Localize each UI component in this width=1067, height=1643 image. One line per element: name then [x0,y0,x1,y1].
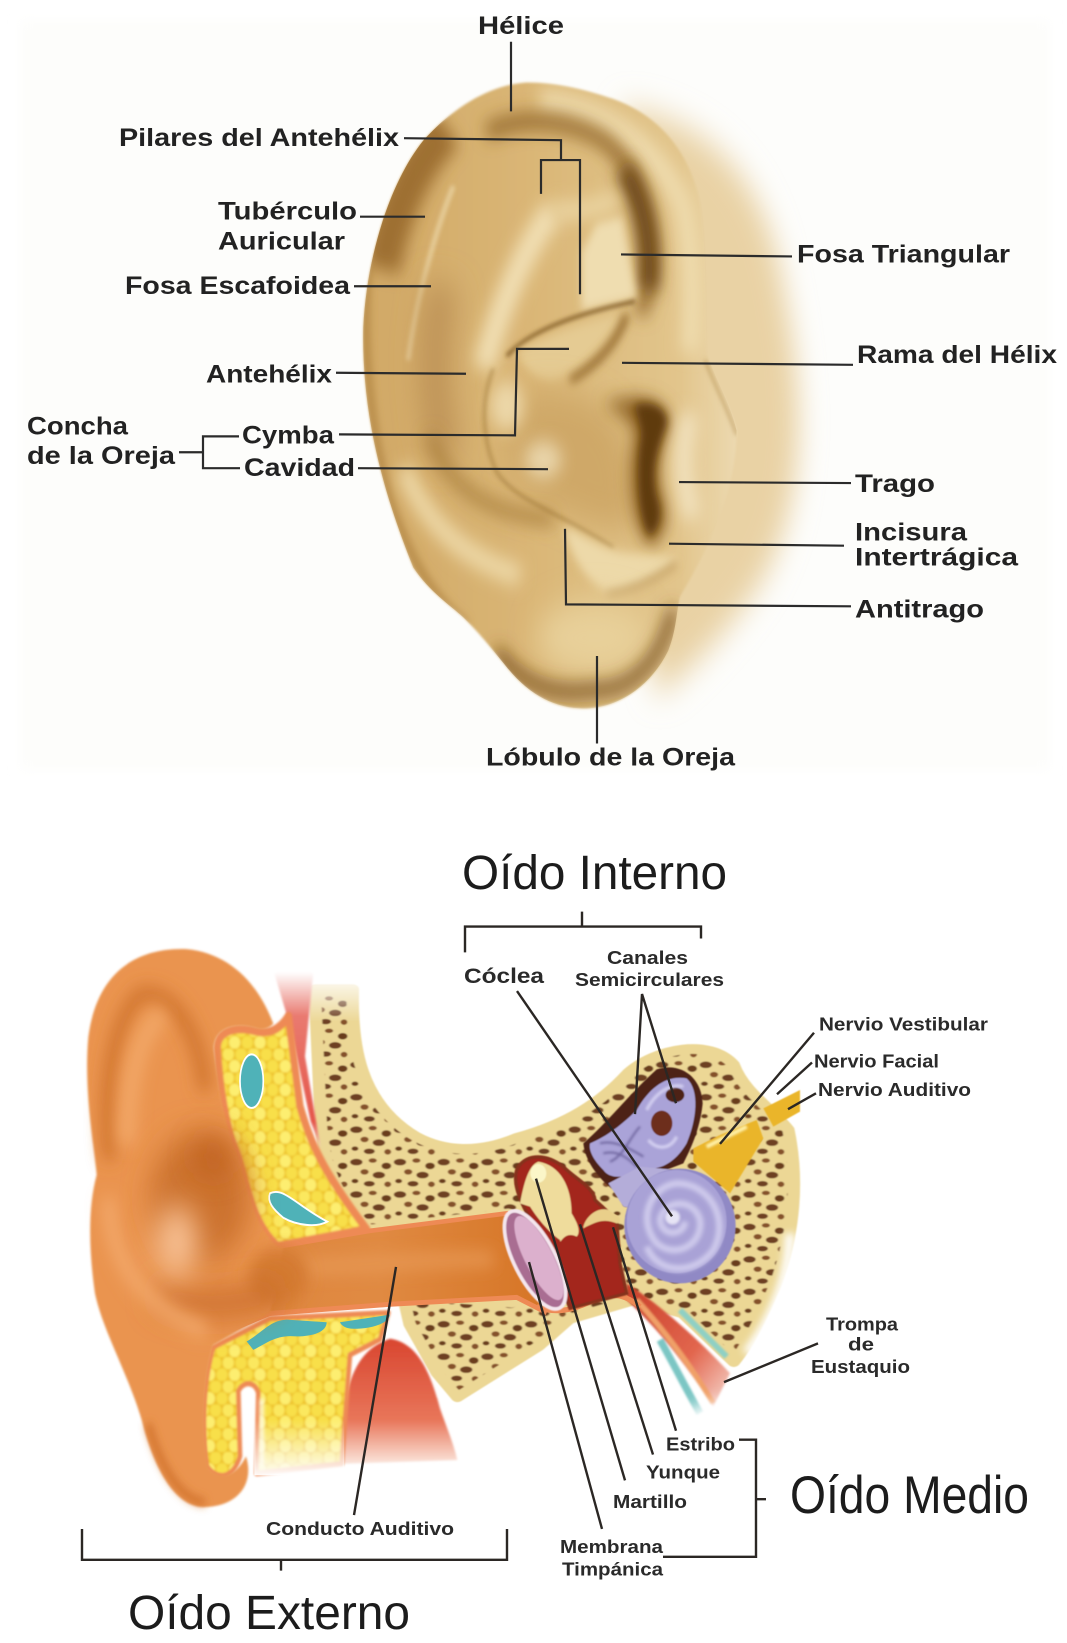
auditory canal [213,1213,543,1339]
concha shadow [150,1133,250,1263]
label: Antehélix: Antehélix [206,361,332,389]
fossa triangular [582,217,637,310]
heading: Oído Interno: Oído Interno [462,846,727,900]
label: Trago: Trago [855,470,935,498]
cochlea spiral [647,1183,719,1268]
concha centre highlight [155,1206,198,1278]
deep concha halo [603,397,672,547]
canal hole lower [651,1111,672,1136]
label: Pilares del Antehélix: Pilares del Antehélix [119,124,399,152]
scaphoid fossa [434,286,447,456]
eustachian muscle band [627,1283,730,1407]
label: Hélice: Hélice [478,12,564,40]
lobe shadow [148,1424,205,1502]
eustachian orange stripe [637,1300,713,1403]
tympanic membrane [492,1202,578,1317]
heading: Oído Medio [663,1440,1029,1557]
label: Cymba [242,349,569,449]
inner antihelix highlight [127,1014,163,1144]
illustration: external ear [363,82,799,708]
rear ridge line [705,360,737,435]
label: Nervio Facial: Nervio Facial [814,1051,939,1071]
label: Antitrago [565,529,984,623]
label: Canales Semicirculares: Semicirculares [575,969,724,990]
nerve highlight [707,1127,747,1147]
nerve stalk [763,1090,800,1127]
label: Nervio Vestibular [720,1014,988,1144]
canal crease [600,1127,643,1167]
concha bowl [509,392,634,529]
deep fold shadow [623,170,649,290]
upper antihelix [553,199,617,211]
lower fat fade [254,1420,344,1475]
label: Yunque: Yunque [646,1461,720,1482]
ear shading and relief [366,101,737,692]
label: Rama del Hélix: Rama del Hélix [857,341,1057,369]
antihelix crest [483,211,553,369]
tympanic membrane inner [505,1210,573,1306]
eustachian teal upper [680,1310,727,1357]
label: Martillo [536,1179,687,1512]
malleus and incus [520,1162,579,1242]
label: Trompa de Eustaquio [724,1314,910,1382]
temporal bone [307,973,794,1397]
labels of the cross-section [82,846,1029,1640]
bone soft right edge [747,1233,790,1353]
upper left helix shade [382,128,447,269]
crus right shadow [570,315,627,381]
label: Tubérculo Auricular: Tubérculo [218,198,357,226]
tragus highlight [683,414,693,518]
crus ridge shadow [507,301,635,356]
label: Tubérculo Auricular [218,198,425,255]
label: Incisura Intertrágica: Incisura [855,519,968,547]
pinna [87,949,283,1507]
canal junction blend [248,1248,308,1305]
teal cartilage lower [269,1192,327,1225]
label: Fosa Triangular: Fosa Triangular [797,240,1010,268]
concha deep top [193,1137,233,1175]
label: Cóclea: Cóclea [464,965,544,988]
label: Nervio Auditivo: Nervio Auditivo [818,1079,971,1100]
label: Conducto Auditivo: Conducto Auditivo [266,1518,454,1539]
canal floor lining [537,1295,640,1311]
canal highlights [647,1086,683,1147]
label: Canales Semicirculares [575,947,724,1114]
label: Concha de la Oreja: Concha [27,412,129,440]
bone top fade [307,973,369,1022]
antihelix ridge highlight [108,1198,207,1332]
scapha lower shadow [430,435,553,520]
antitragus fold [607,563,677,594]
label: Trompa de Eustaquio: Trompa [826,1314,899,1334]
eustachian teal lower [660,1340,700,1413]
canal top lining [277,1213,508,1247]
concha lower shadow [157,1290,277,1304]
deep concha shadow [633,403,667,536]
heading: Oído Interno [462,846,727,952]
concha pale spot [525,441,562,478]
lower muscle [339,1339,457,1464]
cochlea [624,1169,736,1283]
label: Nervio Facial [777,1051,939,1094]
canal bottom lining [217,1297,547,1336]
labyrinth cavity [583,1067,703,1190]
crus of helix [517,315,620,381]
label: Tubérculo Auricular: Auricular [218,228,345,255]
helix inner fold shadow [487,121,652,315]
stapes [583,1209,620,1228]
tympanic membrane outer [492,1202,578,1317]
eustachian fade [683,1403,750,1437]
yellow nerve bundle [693,1120,763,1193]
label: Pilares del Antehélix [119,124,580,294]
label: Incisura Intertrágica: Intertrágica [855,544,1019,572]
label: Nervio Vestibular: Nervio Vestibular [819,1014,988,1035]
scapha shadow [107,994,205,1160]
label: Trompa de Eustaquio: de [848,1333,874,1354]
label: Yunque [580,1224,720,1482]
label: Concha de la Oreja [27,412,240,470]
ear silhouette [363,82,737,708]
label: Antitrago: Antitrago [855,595,984,623]
concha cymba light [490,381,523,431]
helix crest highlight [540,101,692,352]
outer ear cross-section [87,949,547,1507]
labels of the external ear [27,12,1057,771]
label: Estribo [613,1227,735,1455]
canal hole upper [666,1088,684,1102]
heading: Oído Medio: Oído Medio [790,1466,1029,1525]
faint background panel of upper illustration [20,20,1050,770]
left rim shade [366,257,467,626]
label: Concha de la Oreja: de la Oreja [27,442,176,470]
label: Nervio Auditivo [788,1079,971,1109]
neck muscle strip [274,972,321,1148]
label: Hélice [478,12,564,111]
lobe shadow [497,609,673,692]
label: Martillo: Martillo [613,1491,687,1512]
bone body [315,989,794,1397]
label: Lóbulo de la Oreja: Lóbulo de la Oreja [486,743,736,771]
label: Trompa de Eustaquio: Eustaquio [811,1356,910,1377]
teal cartilage upper [240,1054,263,1108]
semicircular canals [590,1078,695,1177]
label: Canales Semicirculares: Canales [607,947,688,968]
vestibule [608,1167,677,1213]
label: Membrana Timpánica: Membrana [560,1536,664,1557]
middle and inner ear detail [492,1067,800,1437]
cochlea body [627,1170,727,1273]
malleus highlight [530,1164,546,1183]
lower helix highlight [403,468,520,576]
label: Membrana Timpánica [529,1262,664,1580]
heading: Oído Externo: Oído Externo [128,1586,410,1640]
concha rim [484,369,613,548]
label: Cymba: Cymba [242,421,335,449]
soft glow behind ear [623,107,799,696]
label: Membrana Timpánica: Timpánica [562,1559,664,1580]
label: Cóclea [464,965,672,1216]
teal cartilage canal left [247,1320,327,1350]
antitragus [563,526,680,592]
canal highlight [297,1259,493,1267]
cochlea center [665,1210,680,1225]
middle ear cavity [516,1157,627,1308]
label: Conducto Auditivo [266,1267,454,1539]
lobe highlight [537,601,650,675]
label: Fosa Escafoidea: Fosa Escafoidea [125,272,351,300]
teal cartilage canal right [340,1315,390,1329]
pinna relief [107,994,308,1502]
white notch edge [257,1399,267,1466]
label: Incisura Intertrágica [669,519,1019,572]
upper fat pad [217,1016,367,1246]
eustachian tube [627,1283,730,1413]
rim ridge [408,186,453,360]
label: Estribo: Estribo [666,1434,735,1455]
label: Cavidad: Cavidad [244,454,355,482]
heading: Oído Externo [82,1529,507,1640]
lower fat pad [204,1313,388,1476]
